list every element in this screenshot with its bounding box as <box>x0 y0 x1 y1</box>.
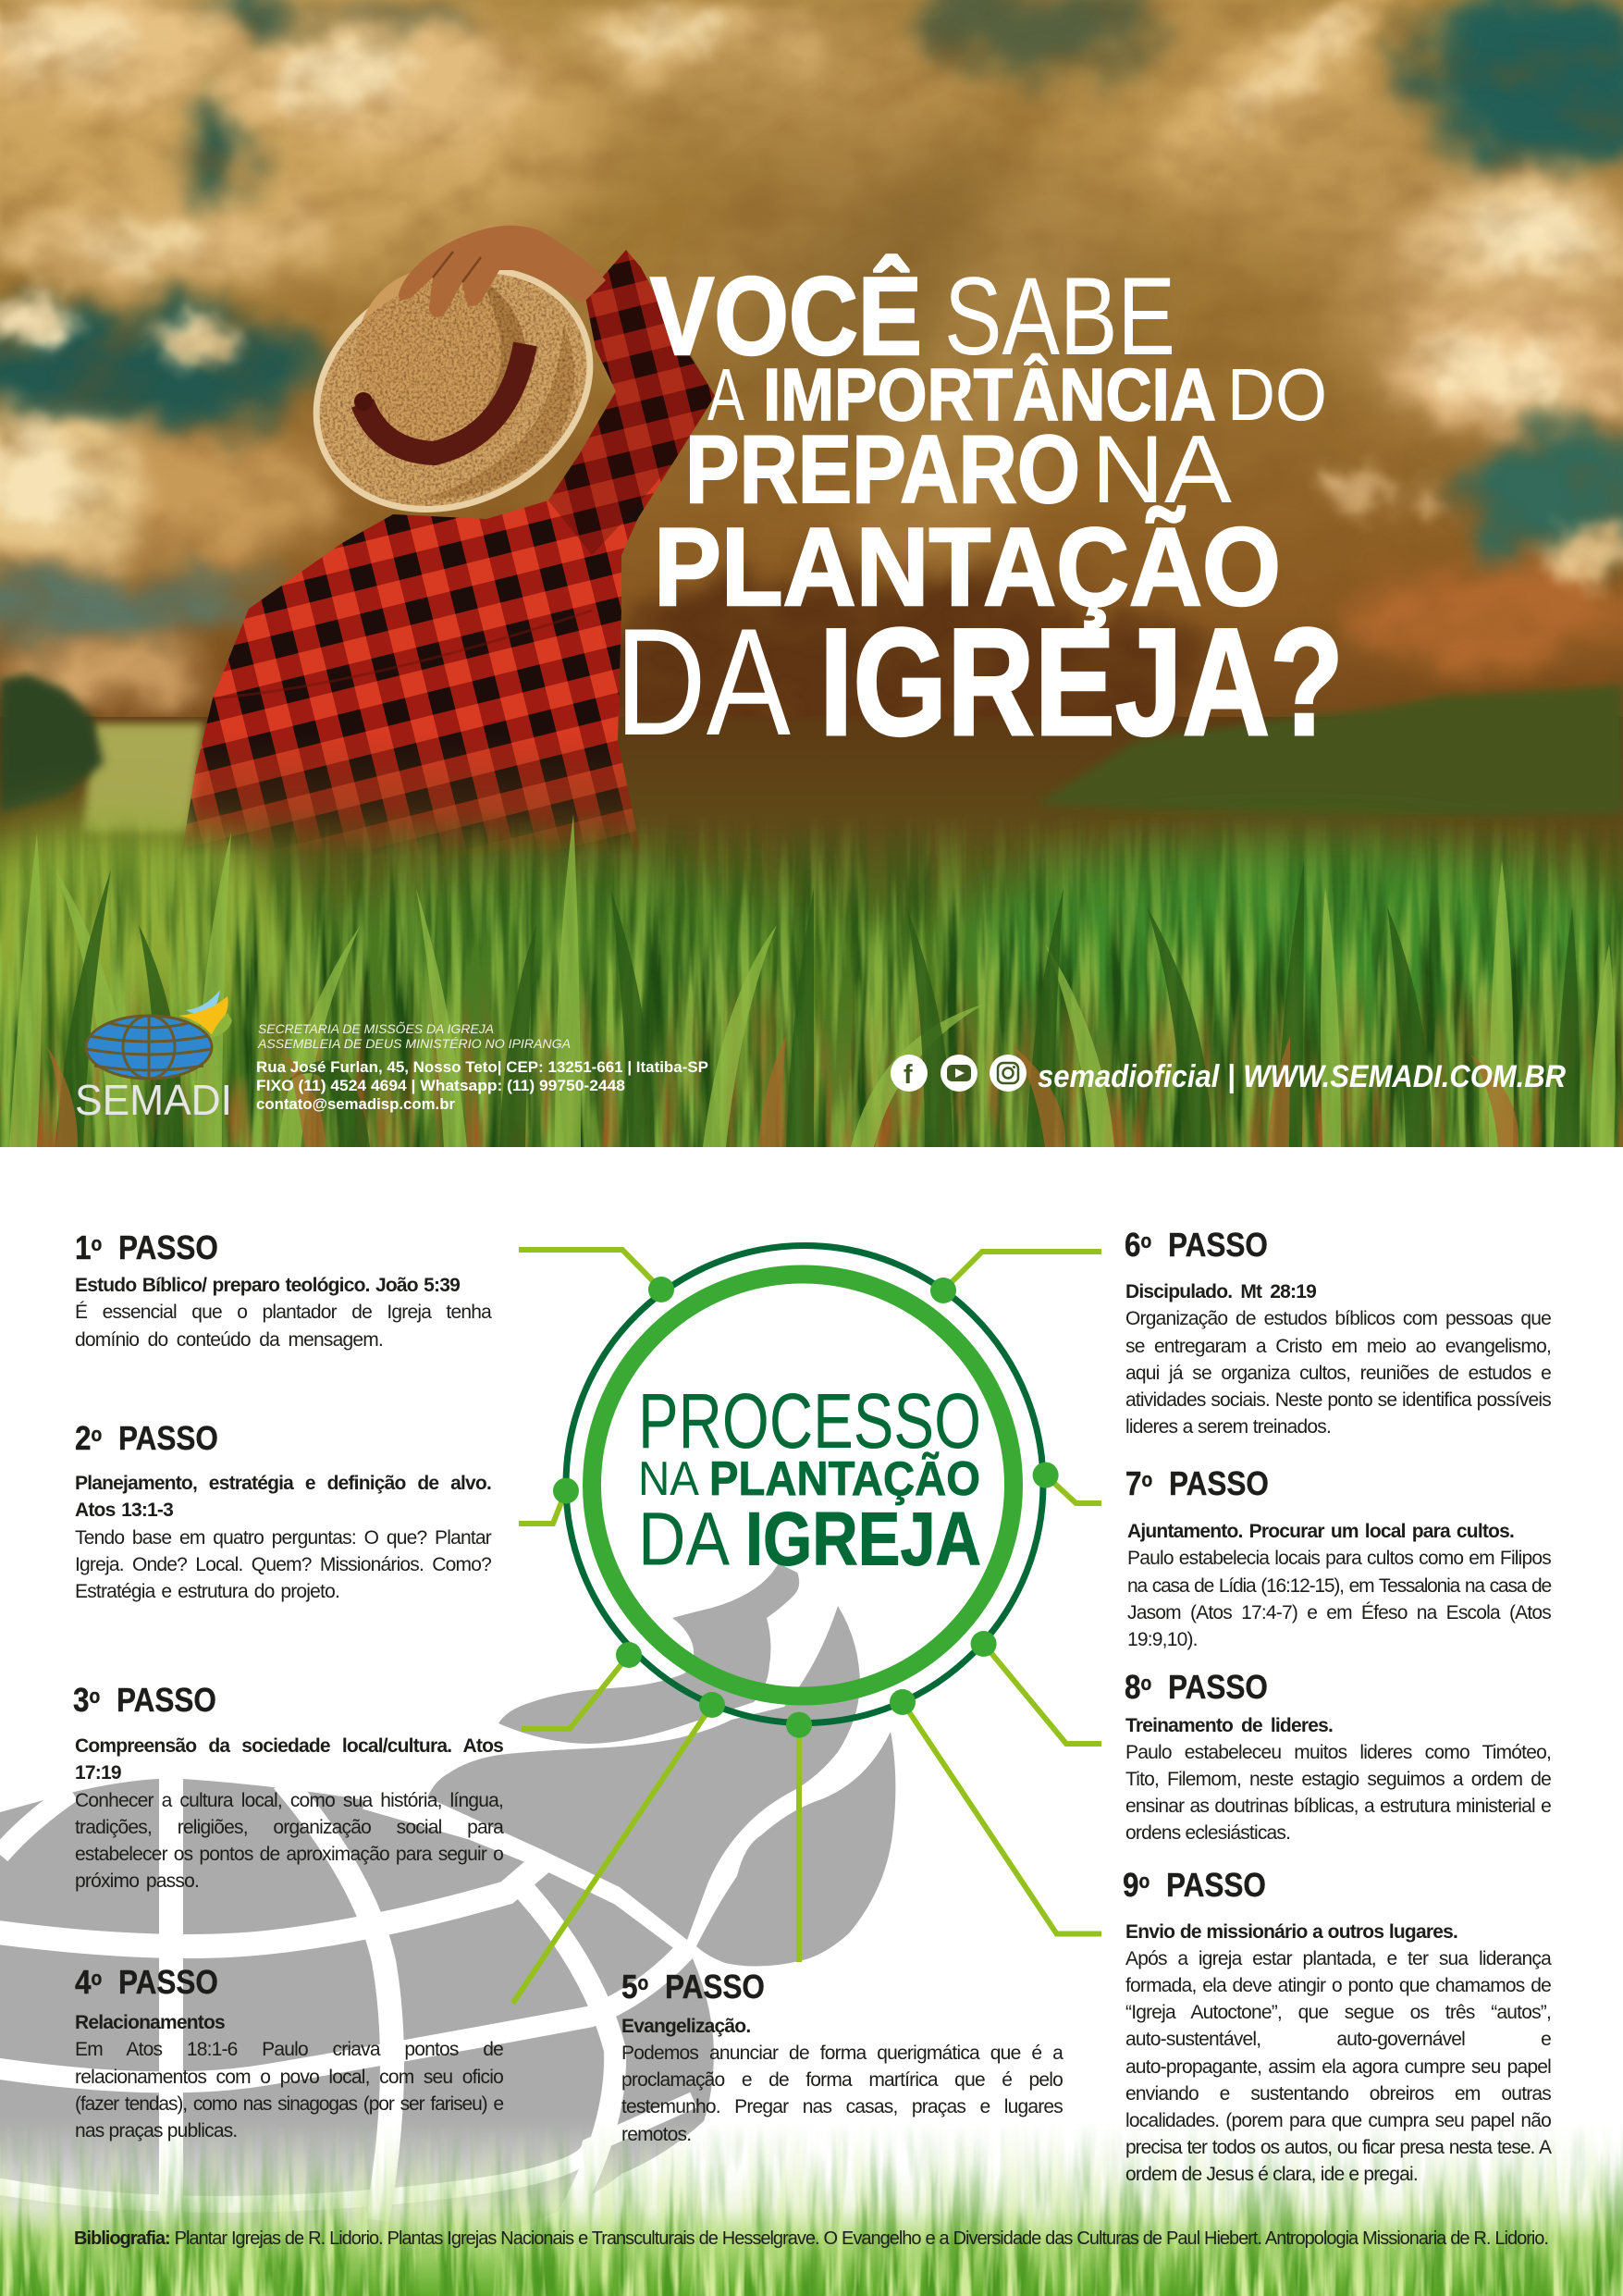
text: atividades sociais. Neste ponto se identifica possíveis <box>1125 1389 1551 1411</box>
globe body <box>0 1779 714 2266</box>
panel: step 1: PASSO <box>118 1228 218 1265</box>
text: lideres a serem treinados. <box>1125 1416 1331 1438</box>
panel: step 7: PASSO <box>1169 1463 1269 1502</box>
main title: PREPARO <box>685 416 1080 524</box>
diagram title: NA <box>638 1452 699 1506</box>
main title: SABE <box>944 254 1175 378</box>
text <box>1125 1712 1551 1847</box>
text: (fazer tendas), como nas sinagogas (por ser fariseu) e <box>75 2093 503 2115</box>
diagram title: PLANTAÇÃO <box>709 1451 980 1506</box>
contact details: contato@semadisp.com.br <box>256 1095 455 1113</box>
main title: DA <box>615 597 791 767</box>
text: Conhecer a cultura local, como sua história, língua, <box>75 1789 503 1811</box>
panel: step 5: PASSO <box>665 1967 765 2006</box>
text: se entregaram a Cristo em meio ao evangelismo, <box>1125 1336 1551 1356</box>
text: Paulo estabelecia locais para cultos como em Filipos <box>1127 1548 1551 1569</box>
icon: youtube <box>941 1055 977 1092</box>
heading <box>73 1680 216 1719</box>
main title: DO <box>1227 353 1327 436</box>
text: precisa ter todos os autos, ou ficar presa nesta tese. A <box>1125 2137 1551 2158</box>
contact details <box>256 1021 708 1113</box>
shirt <box>181 250 715 856</box>
text <box>75 1735 504 1892</box>
heading: 7o <box>1125 1463 1152 1502</box>
heading: 6o <box>1125 1225 1151 1264</box>
farmer figure with plaid shirt and hat <box>181 218 715 856</box>
text <box>75 1275 492 1351</box>
panel: step 9 <box>1123 1867 1551 2191</box>
text <box>1127 1518 1551 1653</box>
connector lines <box>512 1250 1101 2004</box>
text: ordens eclesiásticas. <box>1125 1822 1290 1844</box>
text: Organização de estudos bíblicos com pessoas que <box>1125 1308 1551 1329</box>
social handle and website: semadioficial | WWW.SEMADI.COM.BR <box>1038 1059 1566 1094</box>
text: 17:19 <box>75 1762 121 1784</box>
contact details: Rua José Furlan, 45, Nosso Teto| CEP: 13251-661 | Itatiba-SP <box>256 1058 708 1076</box>
text: Planejamento, estratégia e definição de alvo. <box>75 1473 491 1494</box>
heading <box>75 1419 218 1456</box>
text: auto-propagante, assim ela agora cumpre seu papel <box>1125 2056 1551 2078</box>
text <box>75 2009 503 2144</box>
text: Tito, Filemom, neste estagio seguimos a ordem de <box>1125 1769 1551 1790</box>
inner thick ring <box>592 1275 1014 1697</box>
SEMADI logo <box>75 990 232 1124</box>
flame left tongue <box>498 1563 799 1744</box>
text: Podemos anunciar de forma querigmática que é a <box>621 2043 1063 2064</box>
text: 19:9,10). <box>1127 1629 1198 1650</box>
text: domínio do conteúdo da mensagem. <box>75 1328 383 1351</box>
panel: step 4 <box>75 1963 503 2148</box>
globe <box>86 1016 212 1079</box>
text: É essencial que o plantador de Igreja tenha <box>75 1302 491 1323</box>
text <box>621 2013 1063 2148</box>
text <box>1125 1919 1551 2189</box>
heading <box>75 1228 218 1265</box>
text: Paulo estabeleceu muitos lideres como Timóteo, <box>1125 1742 1551 1763</box>
main title: NA <box>1091 416 1233 524</box>
panel: step 8: PASSO <box>1168 1667 1268 1706</box>
contact details: SECRETARIA DE MISSÕES DA IGREJA <box>258 1021 494 1036</box>
text: Envio de missionário a outros lugares. <box>1125 1921 1457 1943</box>
icon: facebook: f <box>904 1060 913 1090</box>
icon: facebook <box>891 1055 928 1092</box>
panel: step 3: PASSO <box>117 1680 216 1719</box>
panel: step 9: PASSO <box>1166 1866 1266 1904</box>
panel: step 3 <box>73 1680 504 1892</box>
straw hat <box>313 270 594 512</box>
heading: 2o <box>75 1419 102 1456</box>
text: Discipulado. Mt 28:19 <box>1125 1281 1316 1302</box>
panel: step 6 <box>1125 1227 1551 1443</box>
text: Estudo Bíblico/ preparo teológico. João 5:39 <box>75 1275 460 1296</box>
sky background <box>0 0 1623 777</box>
text <box>1125 1278 1551 1440</box>
heading: 9o <box>1123 1866 1150 1904</box>
panel: step 2: PASSO <box>118 1419 218 1456</box>
text: na casa de Lídia (16:12-15), em Tessalonia na casa de <box>1127 1574 1551 1597</box>
panel: step 5 <box>621 1969 1063 2152</box>
text: ensinar as doutrinas bíblicas, a estrutura ministerial e <box>1125 1796 1551 1817</box>
text: Treinamento de lideres. <box>1125 1715 1333 1736</box>
panel: step 6: PASSO <box>1168 1225 1268 1264</box>
text: Atos 13:1-3 <box>75 1500 173 1521</box>
text: ordem de Jesus é clara, ide e pregai. <box>1125 2164 1418 2185</box>
icon: instagram <box>990 1055 1027 1092</box>
panel: step 1 <box>75 1228 492 1351</box>
text: formada, ela deve atingir o ponto que chamamos de <box>1125 1975 1551 1996</box>
flame centre tongue <box>427 1606 860 1940</box>
outer ring <box>566 1245 1043 1722</box>
heading: 3o <box>73 1680 100 1719</box>
hero photo: farmer in grass field under golden sky <box>0 0 1623 1147</box>
text: Tendo base em quatro perguntas: O que? Plantar <box>75 1526 491 1549</box>
sun rays <box>573 0 1239 574</box>
text: localidades. (porem para que cumpra seu papel não <box>1125 2110 1551 2131</box>
heading: 1o <box>75 1228 102 1265</box>
diagram title: IGREJA <box>745 1497 981 1582</box>
main title: IMPORTÂNCIA <box>763 353 1216 436</box>
text <box>75 1473 492 1602</box>
text: próximo passo. <box>75 1870 199 1892</box>
text: aqui já se organiza cultos, reuniões de estudos e <box>1125 1363 1551 1384</box>
social media icons and site <box>891 1055 1566 1094</box>
text: Após a igreja estar plantada, e ter sua liderança <box>1125 1948 1551 1969</box>
panel: step 2 <box>75 1419 492 1602</box>
text: Ajuntamento. Procurar um local para cultos. <box>1127 1521 1514 1542</box>
heading: 5o <box>621 1967 648 2006</box>
main title: IGREJA? <box>819 597 1344 767</box>
text: Estratégia e estrutura do projeto. <box>75 1581 339 1602</box>
text: enviando e sustentando obreiros em outras <box>1125 2083 1551 2105</box>
text: proclamação e de forma martírica que é pelo <box>621 2069 1063 2091</box>
text: “Igreja Autoctone”, que segue os três “autos”, <box>1125 2002 1551 2023</box>
panel: step 4: PASSO <box>118 1963 218 2000</box>
text: relacionamentos com o povo local, com seu oficio <box>75 2067 503 2087</box>
heading: 4o <box>75 1963 102 2000</box>
bottom grass band <box>0 2128 1623 2296</box>
panel: step 7 <box>1125 1465 1551 1654</box>
hat band <box>363 344 525 453</box>
text: Igreja. Onde? Local. Quem? Missionários. Como? <box>75 1554 491 1575</box>
text: Em Atos 18:1-6 Paulo criava pontos de <box>75 2039 503 2060</box>
diagram title <box>638 1377 981 1582</box>
diagram title: DA <box>638 1497 730 1582</box>
main title <box>615 254 1344 767</box>
main title: PLANTAÇÃO <box>654 505 1281 629</box>
text: remotos. <box>621 2124 691 2144</box>
text: testemunho. Pregar nas casas, praças e lugares <box>621 2096 1063 2117</box>
hand and forearm <box>399 226 606 317</box>
text: Compreensão da sociedade local/cultura. Atos <box>75 1735 503 1757</box>
heading: 8o <box>1125 1667 1151 1706</box>
text: Relacionamentos <box>75 2012 225 2033</box>
flame lower tongue <box>696 1732 895 1967</box>
text: estabelecer os pontos de aproximação para seguir o <box>75 1844 503 1865</box>
main title: A <box>707 353 744 436</box>
bibliography: Bibliografia: Plantar Igrejas de R. Lidorio. Plantas Igrejas Nacionais e Transculturais de Hesselgrave. O Evangelho e a Diversidade das Culturas de Paul Hiebert. Antropologia Missionaria de R. Lidorio. <box>74 2228 1548 2249</box>
grass blades foreground <box>0 814 1623 1147</box>
text: nas praças publicas. <box>75 2120 237 2142</box>
flame <box>186 990 220 1014</box>
logotype: SEMADI <box>75 1076 232 1124</box>
main title: VOCÊ <box>650 254 922 378</box>
text: tradições, religiões, organização social para <box>75 1817 503 1838</box>
text: Evangelização. <box>621 2016 750 2037</box>
node dots <box>553 1277 1059 1738</box>
text: Jasom (Atos 17:4-7) e em Éfeso na Escola (Atos <box>1127 1602 1551 1623</box>
contact details: ASSEMBLEIA DE DEUS MINISTÉRIO NO IPIRANGA <box>257 1036 571 1051</box>
text: auto-sustentável, auto-governável e <box>1125 2029 1551 2050</box>
contact details: FIXO (11) 4524 4694 | Whatsapp: (11) 99750-2448 <box>256 1077 625 1094</box>
diagram title: PROCESSO <box>638 1377 981 1464</box>
panel: step 8 <box>1125 1669 1551 1848</box>
field and horizon <box>0 673 1623 1156</box>
